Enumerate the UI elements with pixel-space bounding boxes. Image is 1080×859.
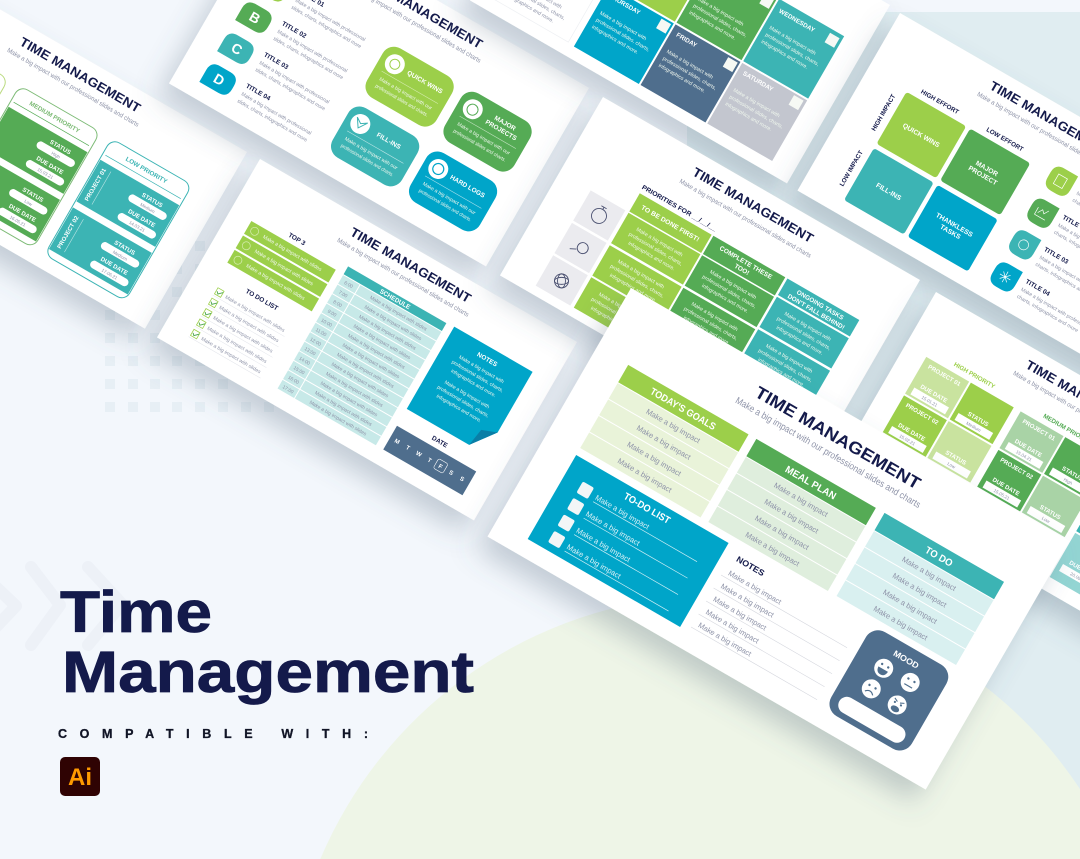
slide title: TIME MANAGEMENT <box>690 164 816 246</box>
medium priority box: MEDIUM PRIORITY <box>28 100 82 135</box>
cell: saturday: professional slides, charts, <box>728 94 784 130</box>
low priority box: Medium <box>112 250 128 262</box>
panel: to do: Make a big impact <box>872 604 930 643</box>
cell: thursday: professional slides, charts, <box>595 17 651 53</box>
card: fill-ins: FILL-INS <box>375 132 402 151</box>
panel: meal plan: Make a big impact <box>753 514 811 552</box>
matrix: LOW IMPACT <box>839 149 865 188</box>
low priority box: 14.03.21 <box>128 220 146 233</box>
letter list: TITLE 02 <box>280 20 308 40</box>
to do list: Make a big impact with slides <box>212 315 274 355</box>
card: major projects: professional slides and charts. <box>452 128 507 164</box>
column: to be done first: professional slides, charts, <box>609 264 665 299</box>
medium priority grid: DUE DATE <box>991 477 1020 498</box>
schedule table: 17:00 <box>281 384 295 396</box>
column: to be done first: infographics and more. <box>608 273 657 304</box>
column: complete these too: TOO! <box>733 263 750 277</box>
sticky note: Make a big impact with <box>443 380 490 410</box>
medium priority grid: STATUS <box>1038 505 1061 521</box>
card: hard logs: professional slides and charts. <box>417 188 472 223</box>
medium priority box: DUE DATE <box>35 156 64 176</box>
column: complete these too: professional slides, charts, <box>701 274 757 310</box>
schedule table: Make a big impact with slides <box>357 314 417 352</box>
schedule table: 14:00 <box>298 356 311 367</box>
column: to be done first: Make a big impact with <box>635 227 684 258</box>
slide subtitle: Make a big impact with our professional slides and charts <box>336 237 470 319</box>
card: hard logs: Make a big impact with our <box>421 181 477 217</box>
medium priority grid: DUE DATE <box>1013 439 1042 459</box>
slide: schedule <box>157 159 577 520</box>
panel: notes: Make a big impact <box>719 582 776 620</box>
high priority grid: PROJECT 01 <box>927 364 962 388</box>
column: ongoing tasks: Make a big impact with <box>765 343 813 375</box>
background tinted panel <box>687 12 1080 859</box>
panel: notes: Make a big impact <box>712 595 769 633</box>
panel: to-do list: Make a big impact <box>584 509 642 548</box>
card: major projects <box>439 87 536 176</box>
cell: thursday: infographics and more. <box>591 24 639 56</box>
panel: today's goals: Make a big impact <box>644 407 703 446</box>
date bar: S <box>448 470 454 477</box>
date bar: F <box>437 464 443 471</box>
slide: letters and quadrant cards <box>169 0 589 266</box>
priorities heading: PRIORITIES FOR __/__/__ <box>640 184 718 233</box>
matrix: HIGH EFFORT <box>919 89 960 116</box>
column: to be done first: TO BE DONE FIRST! <box>640 204 700 244</box>
panel: to do: Make a big impact <box>891 571 949 610</box>
sticky note: infographics and more. <box>435 394 482 424</box>
column: ongoing tasks: DON'T FALL BEHIND! <box>786 293 846 331</box>
column: complete these too: Make a big impact with <box>708 269 757 301</box>
schedule table: Make a big impact with slides <box>341 343 401 381</box>
slide title: TIME MANAGEMENT <box>17 34 143 116</box>
date bar: W <box>414 451 423 459</box>
low priority box: LOW PRIORITY <box>124 156 169 186</box>
panel: to-do list: TO-DO LIST <box>621 491 672 527</box>
medium priority grid: 15.04.21 <box>1015 449 1033 463</box>
schedule table: Make a big impact with slides <box>352 324 412 361</box>
letter list: TITLE 04 <box>244 83 272 103</box>
cell: wednesday: infographics and more. <box>760 39 809 71</box>
column: complete these too: professional slides, charts, <box>682 306 738 342</box>
schedule table: Make a big impact with slides <box>313 390 373 428</box>
numbered list with icons: TITLE 04 <box>1024 278 1051 298</box>
column: ongoing tasks: Make a big impact with <box>783 311 832 343</box>
slide: priorities table <box>500 97 920 458</box>
panel: notes: NOTES <box>735 554 767 578</box>
numbered list with icons <box>987 163 1080 339</box>
high priority grid: STATUS <box>966 412 989 428</box>
schedule table: 15:00 <box>292 365 306 377</box>
medium priority box: 16.05.21 <box>9 215 27 228</box>
slide title: TIME MANAGEMENT <box>348 224 474 306</box>
low priority box: STATUS <box>140 193 163 209</box>
sticky note: professional slides, charts, <box>450 359 504 394</box>
column: to be done first: infographics and more. <box>589 306 638 337</box>
column: complete these too: COMPLETE THESE <box>718 245 774 281</box>
panel: to do: TO DO <box>923 545 954 570</box>
cell: friday: infographics and more. <box>657 63 706 94</box>
slide: priority grids <box>834 292 1080 652</box>
schedule table: 13:00 <box>303 346 317 357</box>
cell: wednesday: Make a big impact with <box>768 25 817 57</box>
panel: notes: Make a big impact <box>704 608 761 646</box>
cell: tuesday: infographics and more. <box>688 10 736 42</box>
icon: Adobe Illustrator: Ai <box>68 764 92 791</box>
low priority box: PROJECT 01 <box>84 167 108 202</box>
cell: tuesday <box>677 0 777 60</box>
cell: thursday: Make a big impact with <box>599 11 647 42</box>
left text panel <box>494 0 635 42</box>
card: quick wins: Make a big impact with our <box>378 76 433 112</box>
cell: tuesday: professional slides, charts, <box>692 3 748 39</box>
cell: saturday <box>707 63 807 161</box>
schedule table: Make a big impact with slides <box>308 400 368 438</box>
letter list <box>199 0 371 144</box>
medium priority box: STATUS <box>48 140 71 156</box>
card: major projects: Make a big impact with our <box>456 121 511 157</box>
panel: to-do list <box>528 455 729 627</box>
to do list: Make a big impact with slides <box>218 305 280 344</box>
column: ongoing tasks: infographics and more. <box>757 357 805 389</box>
slide subtitle: Make a big impact with our professional slides and charts <box>678 178 813 260</box>
schedule table: Make a big impact with slides <box>330 362 390 400</box>
main slide <box>488 288 1069 790</box>
panel: today's goals: TODAY'S GOALS <box>648 386 718 433</box>
column: complete these too: infographics and more. <box>700 283 749 315</box>
card: quick wins: QUICK WINS <box>406 70 444 96</box>
background dot pattern <box>105 241 274 412</box>
cell: wednesday: WEDNESDAY <box>777 8 817 35</box>
high priority grid: DUE DATE <box>919 384 948 405</box>
column: complete these too: infographics and more. <box>682 315 731 347</box>
medium priority box: STATUS <box>21 187 44 204</box>
schedule table: 9:00 <box>326 309 338 319</box>
panel: to-do list: Make a big impact <box>575 526 633 565</box>
background chevrons <box>0 567 122 645</box>
schedule table: Make a big impact with slides <box>346 333 406 371</box>
high priority grid: 15.02.21 <box>898 433 916 447</box>
schedule table: Make a big impact with slides <box>319 381 379 419</box>
column: ongoing tasks: professional slides, charts, <box>775 316 831 352</box>
panel: to-do list: Make a big impact <box>565 542 623 581</box>
main slide title: TIME MANAGEMENT <box>752 383 924 494</box>
top 3 list: TOP 3 <box>287 232 307 247</box>
sticky note: NOTES <box>476 351 499 369</box>
matrix: HIGH IMPACT <box>871 93 897 132</box>
cell: monday <box>610 0 711 22</box>
column: ongoing tasks: professional slides, charts, <box>757 348 813 384</box>
letter list: slides, charts, infographics and more <box>272 36 344 81</box>
schedule table: SCHEDULE <box>378 288 412 312</box>
top 3 list: Make a big impact with slides <box>245 263 306 302</box>
matrix: PROJECT <box>967 165 999 188</box>
numbered list with icons: charts, infographics and more <box>1015 294 1079 334</box>
high priority grid: DUE DATE <box>897 423 926 443</box>
cell: wednesday <box>743 0 844 99</box>
column: ongoing tasks: ONGOING TASKS <box>795 289 845 322</box>
cell: wednesday: professional slides, charts, <box>764 32 820 68</box>
letter list: B <box>247 8 263 27</box>
column: to be done first: Make a big impact with <box>597 292 646 323</box>
cell: thursday <box>574 0 674 84</box>
slide: effort impact matrix <box>798 13 1080 374</box>
panel: to-do list: Make a big impact <box>594 493 652 532</box>
date bar: DATE <box>430 435 449 450</box>
matrix: THANKLESS <box>934 212 974 239</box>
cell: saturday: infographics and more. <box>724 101 773 133</box>
date bar: S <box>458 476 465 483</box>
schedule table <box>278 266 446 445</box>
compatible with label: COMPATIBLE WITH: <box>58 727 368 741</box>
column: ongoing tasks: infographics and more. <box>775 325 824 357</box>
medium priority box: Low <box>23 199 34 207</box>
panel: meal plan: Make a big impact <box>763 497 821 536</box>
card: major projects: MAJOR <box>493 115 517 133</box>
slide: priority columns <box>0 0 247 329</box>
schedule table: 12:00 <box>309 337 322 348</box>
letter list: D <box>211 70 228 89</box>
column: to be done first: professional slides, charts, <box>590 297 646 332</box>
low priority box: DUE DATE <box>99 257 128 277</box>
medium priority grid <box>977 402 1080 537</box>
icon: angry face <box>884 692 910 718</box>
sticky note: Make a big impact with <box>458 355 505 385</box>
cell: saturday: Make a big impact with <box>732 88 781 119</box>
high priority grid: HIGH PRIORITY <box>952 361 997 391</box>
slide: weekly planner <box>470 0 890 183</box>
medium priority box <box>0 85 100 248</box>
letter list: C <box>229 39 245 58</box>
matrix: FILL-INS <box>874 182 903 202</box>
schedule table: Make a big impact with slides <box>335 352 395 390</box>
low priority box: DUE DATE <box>127 209 156 229</box>
to do list: Make a big impact with slides <box>206 326 268 365</box>
schedule table: 8:00 <box>332 299 343 309</box>
panel: today's goals: Make a big impact <box>635 423 693 462</box>
card: quick wins <box>361 42 459 131</box>
column: complete these too <box>647 236 785 392</box>
column: to be done first <box>574 193 712 349</box>
medium priority grid: PROJECT 01 <box>1021 419 1056 443</box>
medium priority box: DUE DATE <box>7 204 37 224</box>
low priority box: PROJECT 02 <box>57 215 81 250</box>
column: to be done first: infographics and more. <box>627 241 676 272</box>
card: fill-ins: Make a big impact with our <box>343 136 399 172</box>
letter list: Make a big impact with professional <box>258 60 330 105</box>
letter list: slides, charts, infographics and more <box>290 5 362 50</box>
medium priority grid: High <box>1063 477 1074 486</box>
panel: to do <box>837 513 1004 665</box>
cell: saturday: SATURDAY <box>741 70 775 94</box>
cell: friday: Make a big impact with <box>665 49 714 81</box>
low priority box: STATUS <box>113 240 136 257</box>
sticky note: infographics and more. <box>450 368 497 399</box>
matrix: MAJOR <box>974 160 999 178</box>
panel: today's goals <box>580 365 749 518</box>
panel: notes: Make a big impact <box>697 621 754 659</box>
card: hard logs <box>404 147 502 236</box>
card: fill-ins <box>326 102 424 191</box>
medium priority grid: PROJECT 02 <box>999 458 1034 481</box>
letter list: slides, charts, infographics and more <box>254 67 326 112</box>
low priority box: Medium <box>139 202 156 214</box>
schedule table: 7:00 <box>337 290 349 300</box>
date bar: T <box>426 458 433 465</box>
slide subtitle: Make a big impact with our professional slides and charts <box>6 47 140 129</box>
top 3 list <box>227 212 341 311</box>
panel: meal plan: MEAL PLAN <box>783 464 838 502</box>
schedule table: Make a big impact with slides <box>324 371 384 409</box>
low priority box <box>45 138 192 301</box>
high priority grid: STATUS <box>944 450 967 467</box>
medium priority grid: Low <box>1041 516 1051 525</box>
schedule table: 11:00 <box>314 327 328 338</box>
matrix: TASKS <box>938 224 962 241</box>
schedule table: 10:00 <box>320 318 333 329</box>
top 3 list: Make a big impact with slides <box>261 234 323 273</box>
top 3 list: Make a big impact with slides <box>253 249 314 288</box>
medium priority grid: 15.05.21 <box>993 488 1011 501</box>
heading: Time Management <box>60 580 474 705</box>
date bar: M <box>393 438 400 446</box>
cell: friday: professional slides, charts, <box>661 56 717 92</box>
date bar <box>383 417 481 495</box>
mood input pill <box>835 694 909 746</box>
to do list: Make a big impact with slides <box>200 336 262 376</box>
card: fill-ins: professional slides and charts. <box>339 143 394 178</box>
icon: happy face <box>871 655 897 681</box>
matrix: LOW EFFORT <box>985 126 1025 153</box>
low priority grid <box>1050 495 1080 603</box>
low priority box: 17.06.21 <box>101 268 119 281</box>
heading: Time Management: Time <box>60 580 212 645</box>
heading: Time Management: Management <box>62 640 474 705</box>
background green circle <box>320 595 1080 859</box>
panel: meal plan: Make a big impact <box>744 530 802 569</box>
schedule table: Make a big impact with slides <box>368 295 428 333</box>
letter list: TITLE 03 <box>262 52 290 71</box>
numbered list with icons: TITLE 03 <box>1042 246 1070 266</box>
high priority grid <box>883 347 1019 483</box>
card: major projects: PROJECTS <box>484 119 518 143</box>
to do list: TO DO LIST <box>244 288 279 312</box>
panel: mood <box>824 625 953 756</box>
to do list <box>189 275 296 378</box>
panel: mood: MOOD <box>892 648 921 671</box>
icon: neutral face <box>897 669 923 695</box>
matrix: QUICK WINS <box>901 122 941 150</box>
column: ongoing tasks <box>722 279 859 433</box>
panel: notes: Make a big impact <box>727 569 784 607</box>
to do list: Make a big impact with slides <box>224 295 286 334</box>
panel: notes <box>691 551 861 700</box>
panel: today's goals: Make a big impact <box>625 440 684 479</box>
column: complete these too: Make a big impact with <box>690 301 739 333</box>
column: to be done first: professional slides, charts, <box>627 232 683 267</box>
high priority grid: PROJECT 02 <box>904 403 940 427</box>
main slide subtitle: Make a big impact with our professional slides and charts <box>733 395 923 511</box>
letter list: Make a big impact with professional <box>240 91 312 137</box>
panel: to do: Make a big impact <box>900 555 958 593</box>
date bar: T <box>404 445 411 452</box>
icon: sad face <box>858 676 884 702</box>
letter list: Make a big impact with professional <box>276 29 348 74</box>
sticky note: professional slides, charts, <box>436 385 490 419</box>
high priority box <box>0 32 9 195</box>
letter list: slides, charts, infographics and more <box>236 98 308 144</box>
sticky note <box>407 327 533 454</box>
card: quick wins: professional slides and charts. <box>374 83 429 119</box>
medium priority box: High <box>51 151 61 160</box>
medium priority box: 15.03.21 <box>36 167 54 180</box>
card: hard logs: HARD LOGS <box>449 174 486 200</box>
panel: meal plan <box>708 439 876 591</box>
high priority grid: Low <box>947 461 957 470</box>
schedule table: 6:00 <box>343 280 354 290</box>
high priority grid: Medium <box>965 421 982 433</box>
schedule table: 16:00 <box>287 375 300 386</box>
high priority grid: 15.01.21 <box>921 395 939 408</box>
panel: meal plan: Make a big impact <box>772 481 830 519</box>
cell: friday: FRIDAY <box>675 32 699 50</box>
panel: today's goals: Make a big impact <box>616 456 674 495</box>
schedule table: Make a big impact with slides <box>363 304 423 342</box>
icon: Adobe Illustrator <box>60 757 100 796</box>
column: to be done first: Make a big impact with <box>616 259 665 291</box>
cell: friday <box>641 24 740 123</box>
panel: to do: Make a big impact <box>881 588 939 626</box>
icon column <box>536 190 625 306</box>
matrix <box>833 76 1036 272</box>
